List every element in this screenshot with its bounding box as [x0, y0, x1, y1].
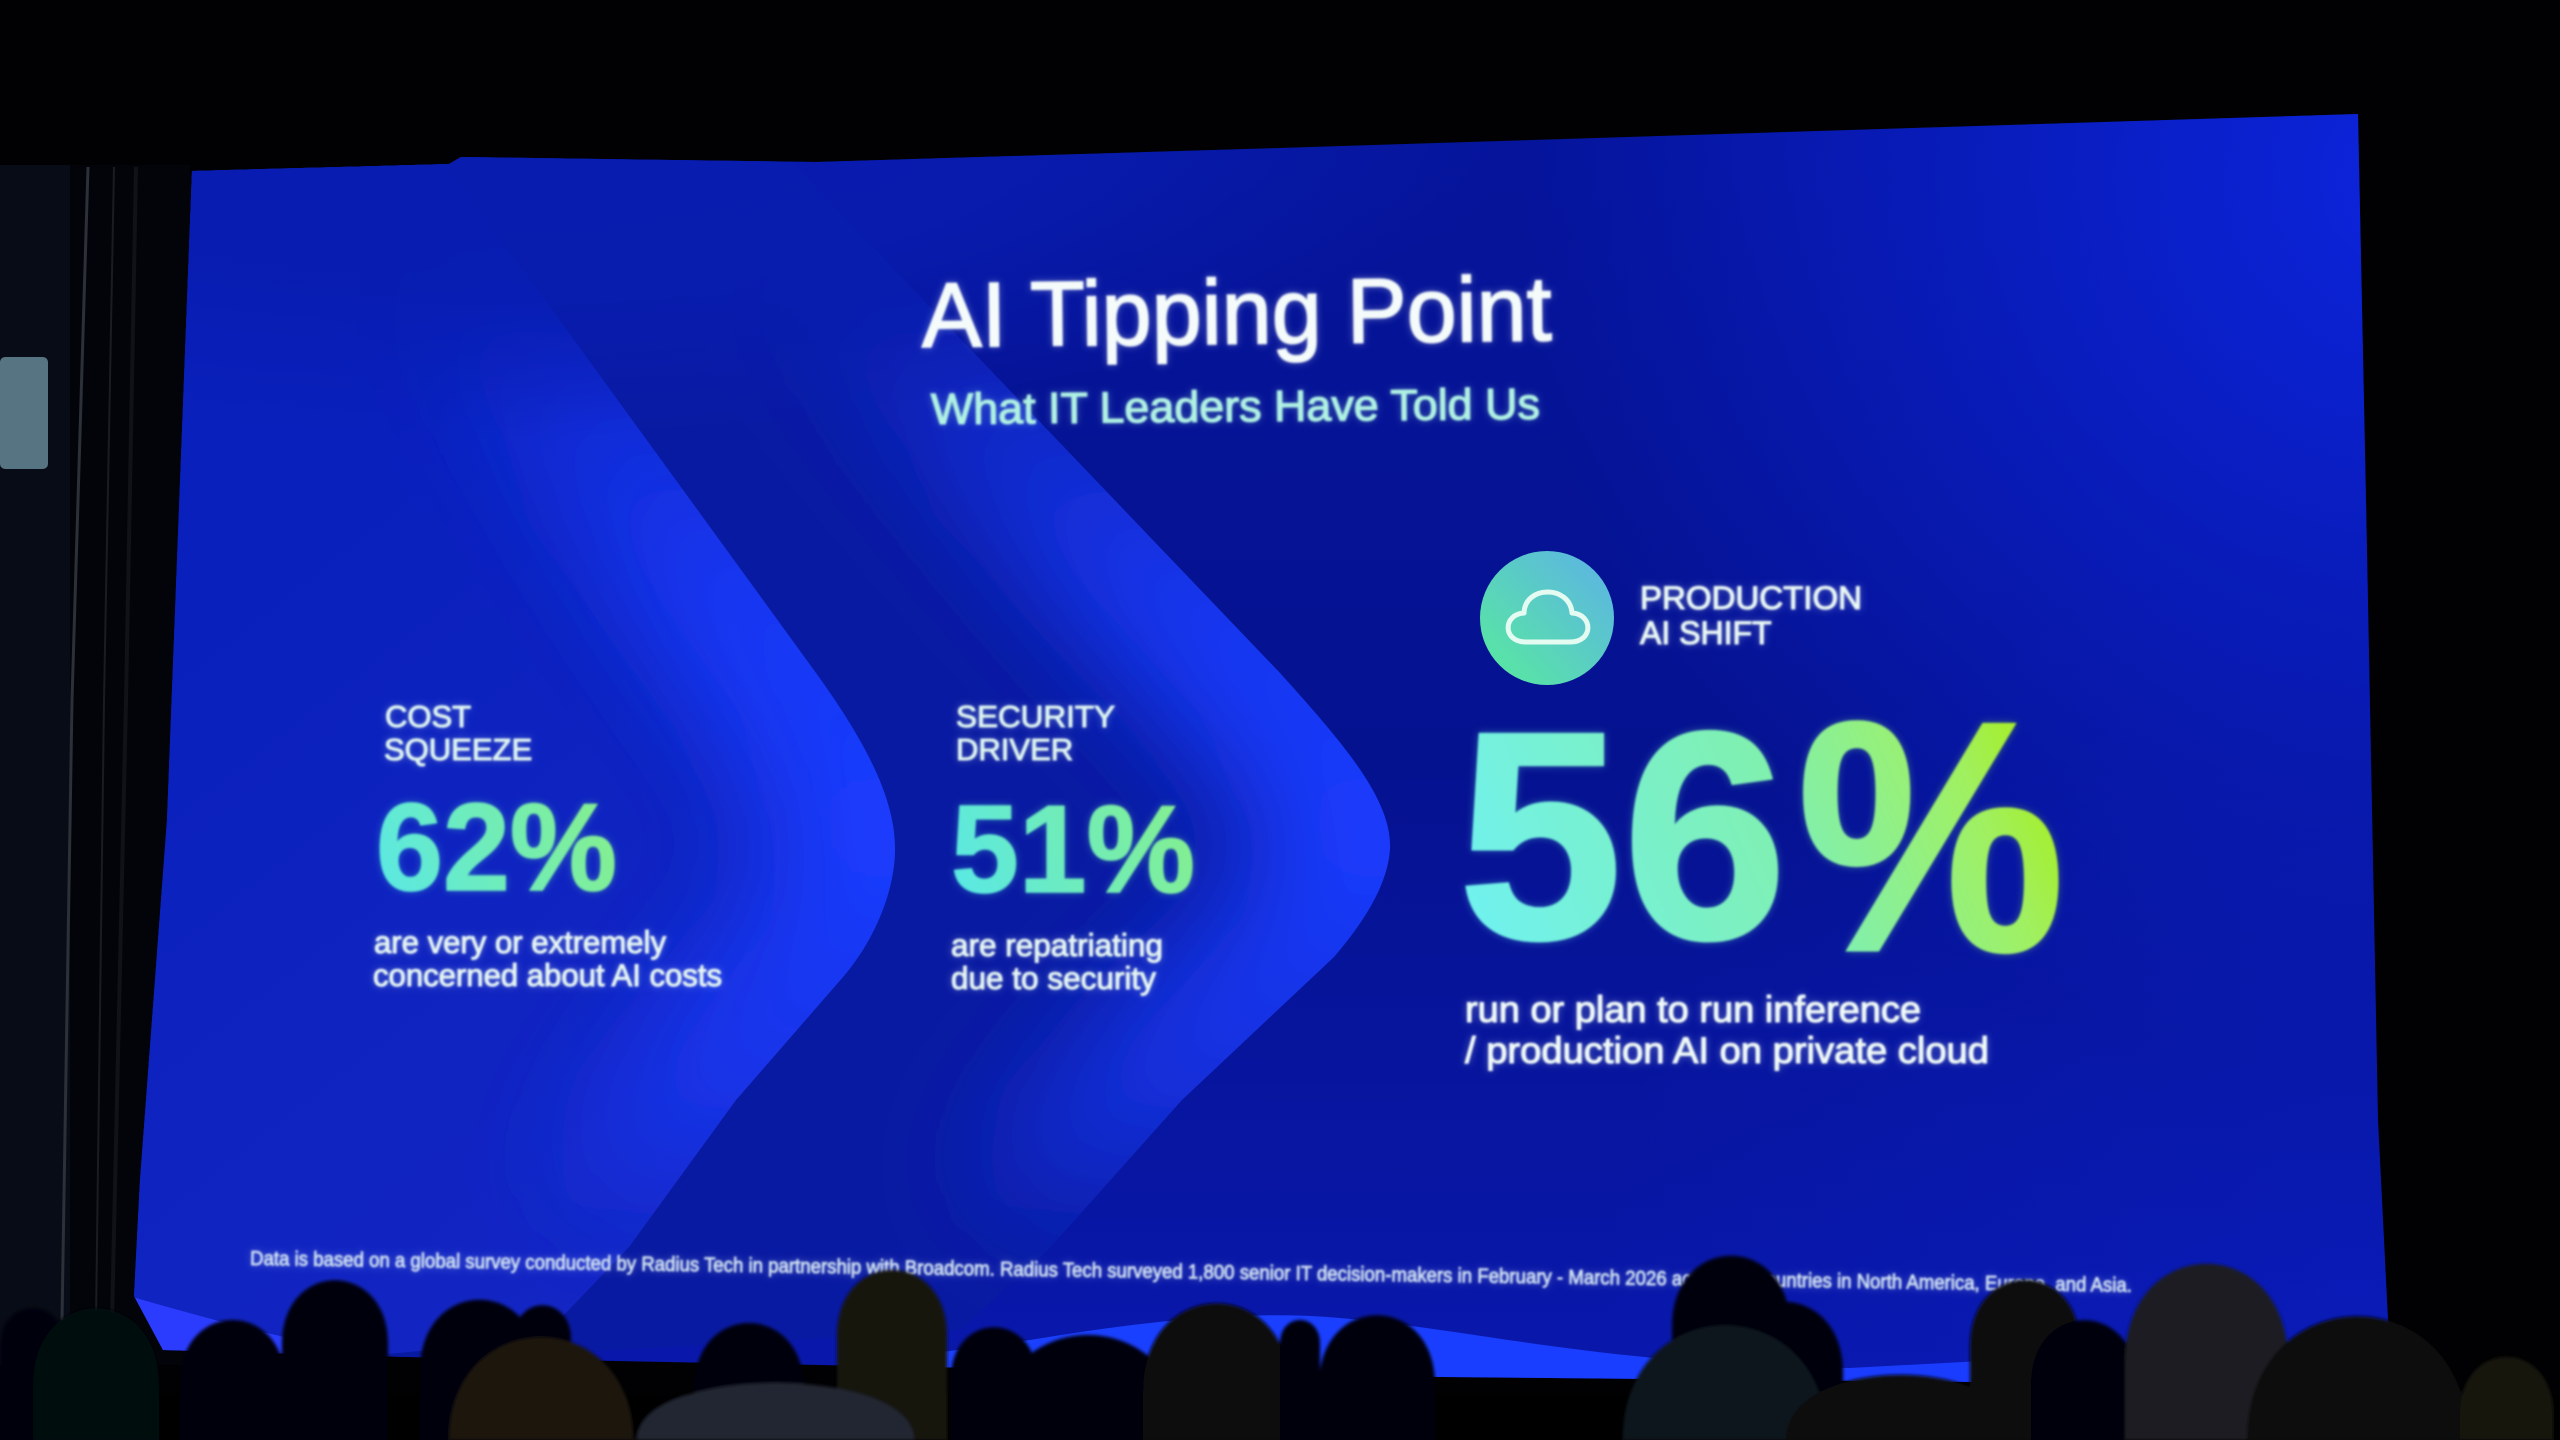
footnote: Data is based on a global survey conducted by Radius Tech in partnership with Broadcom. Radius Tech surveyed 1,800 senior IT decision-makers in February - March 2026 across 11 countries in North America, Europe, and Asia. [250, 1247, 2132, 1297]
description: production: / production AI on private cloud [1465, 1030, 1989, 1071]
description: production: run or plan to run inference [1465, 989, 1921, 1030]
curtain at left of the screen [0, 165, 190, 1365]
subtitle: What IT Leaders Have Told Us [931, 380, 1540, 434]
bottom glow wave [134, 1298, 1972, 1382]
label: security driver: DRIVER [956, 732, 1073, 767]
audience silhouettes [0, 1256, 2560, 1440]
icon: cloud in circle [1480, 551, 1614, 685]
chevron: second arrow shape [134, 157, 1390, 1358]
label: security driver: SECURITY [956, 699, 1115, 734]
label: cost squeeze: SQUEEZE [384, 732, 532, 767]
stat: cost squeeze [373, 699, 722, 993]
digits: 56: 56 [1458, 670, 1787, 1001]
title: AI Tipping Point [921, 258, 1552, 367]
description: cost: concerned about AI costs [373, 957, 722, 993]
description: cost: are very or extremely [374, 924, 666, 960]
label: production AI shift: AI SHIFT [1640, 615, 1772, 651]
chevron: first arrow shape [134, 164, 895, 1354]
description: security: are repatriating [951, 927, 1163, 963]
stat: security driver [951, 699, 1195, 996]
stat: production AI shift [1458, 551, 2065, 1071]
description: security: due to security [951, 960, 1156, 996]
number: 56% [1458, 653, 2065, 1020]
percent sign: % [1797, 653, 2065, 1020]
number: 51%: 51% [951, 781, 1195, 919]
label: cost squeeze: COST [385, 699, 471, 734]
top fade where chevrons dissolve [186, 143, 1431, 398]
number: 62%: 62% [376, 779, 617, 917]
label: production AI shift: PRODUCTION [1640, 580, 1862, 616]
